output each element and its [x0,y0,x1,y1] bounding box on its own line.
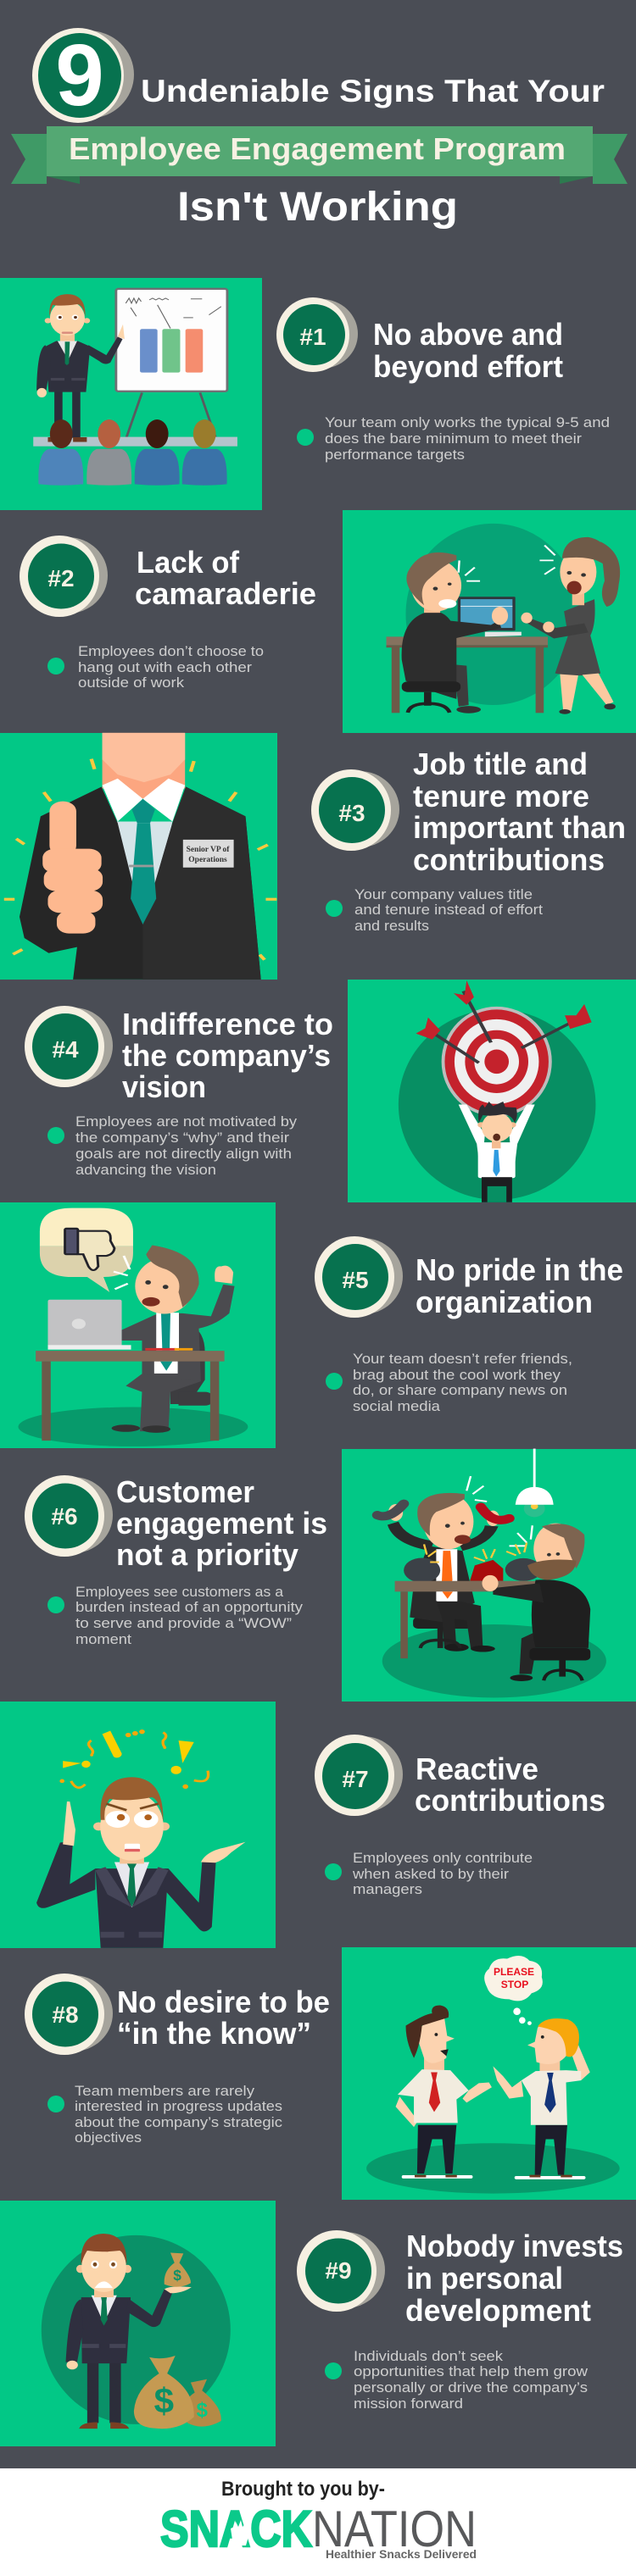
bullet [47,1596,64,1613]
illustration: executive giving a thumbs up: Senior VP of [187,846,230,854]
illustration: man with money bags: $ [197,2399,208,2422]
illustration: confused manager with question marks [0,1702,276,1948]
description: do, or share company news on [353,1382,567,1398]
description: advancing the vision [75,1162,216,1178]
badge #4: #4 [52,1036,79,1063]
heading: No above and [373,317,563,352]
illustration: two men with phones at a desk [342,1449,636,1702]
description [75,2083,283,2146]
description: goals are not directly align with [75,1146,292,1162]
bullet [47,658,64,675]
illustration: frustrated man with thumbs-down bubble [0,1202,276,1448]
badge #6 [25,1475,113,1557]
description: Employees only contribute [353,1850,533,1866]
panel: sign 4 [25,980,636,1202]
badge #4 [25,1006,113,1087]
heading: tenure more [413,779,589,813]
panel: sign 7 [0,1702,605,1948]
description: Your team doesn’t refer friends, [353,1351,572,1367]
description: about the company’s strategic [75,2114,283,2130]
description: burden instead of an opportunity [75,1599,304,1615]
badge #1: #1 [299,324,326,350]
bullet [325,2362,342,2379]
heading: development [405,2293,591,2328]
heading: the company’s [122,1038,331,1073]
illustration: presenter and audience [0,278,262,510]
description: to serve and provide a “WOW” [75,1615,292,1631]
illustration: arguing coworkers at a desk [343,510,636,733]
description [75,1584,304,1647]
badge #8: #8 [52,2001,79,2028]
description: Employees are not motivated by [75,1113,298,1130]
badge #3 [311,769,399,851]
badge: number 9: 9 [55,26,104,124]
description: Employees see customers as a [75,1584,284,1600]
description [354,2348,589,2412]
ribbon banner: Employee Engagement Program [69,131,566,166]
description: Your company values title [354,886,533,902]
description: moment [75,1631,131,1647]
footer [0,2468,636,2576]
description: Individuals don’t seek [354,2348,504,2364]
heading: No pride in the [416,1252,623,1287]
description [354,886,543,934]
heading: Job title and [413,747,588,781]
bullet [326,1373,343,1390]
badge #7: #7 [342,1766,369,1792]
illustration: two men talking with a thought bubble: PLEASE [494,1966,534,1978]
badge #7 [315,1735,403,1816]
description: managers [353,1881,422,1897]
description: social media [353,1398,441,1414]
description [325,414,610,463]
badge #6: #6 [51,1503,78,1530]
description: interested in progress updates [75,2098,282,2114]
title line 3: Isn't Working [177,185,458,230]
badge #2 [20,536,108,617]
illustration: man holding a target with arrows [348,980,636,1202]
heading: Lack of [137,545,240,580]
panel: sign 1 [0,278,610,510]
heading [135,545,316,611]
description: objectives [75,2129,142,2146]
heading: not a priority [116,1537,298,1572]
panel: sign 3 [0,733,626,980]
heading: in personal [406,2261,563,2296]
sponsor line: Brought to you by- [221,2478,385,2501]
panel: sign 2 [20,510,636,733]
description: performance targets [325,447,465,463]
heading: “in the know” [117,2016,311,2051]
panel: sign 6 [25,1449,636,1702]
badge #5 [315,1236,403,1318]
bullet [47,2096,64,2112]
illustration: man with money bags [0,2201,276,2446]
header [11,26,628,230]
badge #8 [25,1974,113,2055]
description: the company’s “why” and their [75,1130,289,1146]
ribbon banner [11,126,628,184]
heading: Indifference to [122,1007,333,1041]
heading: Customer [116,1474,254,1509]
heading: contributions [415,1783,605,1818]
description: personally or drive the company’s [354,2379,588,2396]
heading [415,1752,605,1818]
heading: Nobody invests [406,2229,623,2263]
description: Employees don’t choose to [78,643,264,659]
bullet [326,900,343,917]
badge #9 [297,2230,385,2312]
badge #5: #5 [342,1267,369,1293]
badge #2: #2 [47,565,75,591]
description: when asked to by their [352,1866,509,1882]
panel: sign 8 [25,1947,636,2200]
title line 1: Undeniable Signs That Your [141,74,605,108]
bullet [297,429,314,446]
logo: SnackNation: Healthier Snacks Delivered [326,2547,477,2561]
illustration: executive giving a thumbs up [0,733,277,980]
description: hang out with each other [78,659,252,675]
bullet [47,1127,64,1144]
heading: organization [416,1285,593,1319]
heading: vision [122,1069,206,1104]
heading: contributions [413,842,605,877]
panel: sign 5 [0,1202,623,1448]
description [78,643,264,691]
heading [116,1474,327,1572]
heading: No desire to be [117,1985,330,2019]
badge #3: #3 [338,800,365,826]
logo: SnackNation: SNACK [160,2501,312,2557]
description: and results [354,918,429,934]
heading: important than [413,810,626,845]
description: opportunities that help them grow [354,2363,589,2379]
illustration: two men talking with a thought bubble [342,1947,636,2200]
description [353,1351,572,1414]
badge #1 [276,297,358,372]
logo: SnackNation [160,2501,477,2561]
bullet [325,1863,342,1880]
description [75,1113,298,1178]
panel: sign 9 [0,2201,623,2446]
heading: camaraderie [135,576,316,611]
badge: number 9 [32,26,134,124]
heading [413,747,626,877]
description: outside of work [78,675,185,691]
logo: SnackNation: NATION [312,2501,477,2557]
description: Team members are rarely [75,2083,255,2099]
illustration: executive giving a thumbs up: Operations [188,856,227,864]
heading: Reactive [416,1752,538,1786]
description [352,1850,533,1897]
heading [117,1985,330,2051]
heading [122,1007,333,1104]
description: does the bare minimum to meet their [325,430,582,447]
description: mission forward [354,2396,463,2412]
description: brag about the cool work they [353,1367,561,1383]
heading [373,317,563,384]
badge #9: #9 [325,2257,352,2284]
illustration: two men talking with a thought bubble: STOP [501,1979,528,1990]
heading [405,2229,623,2328]
description: Your team only works the typical 9-5 and [325,414,610,430]
heading [416,1252,623,1319]
illustration: man with money bags: $ [173,2267,181,2284]
heading: engagement is [116,1506,327,1541]
heading: beyond effort [373,349,563,384]
description: and tenure instead of effort [354,902,543,918]
illustration: man with money bags: $ [154,2380,174,2420]
